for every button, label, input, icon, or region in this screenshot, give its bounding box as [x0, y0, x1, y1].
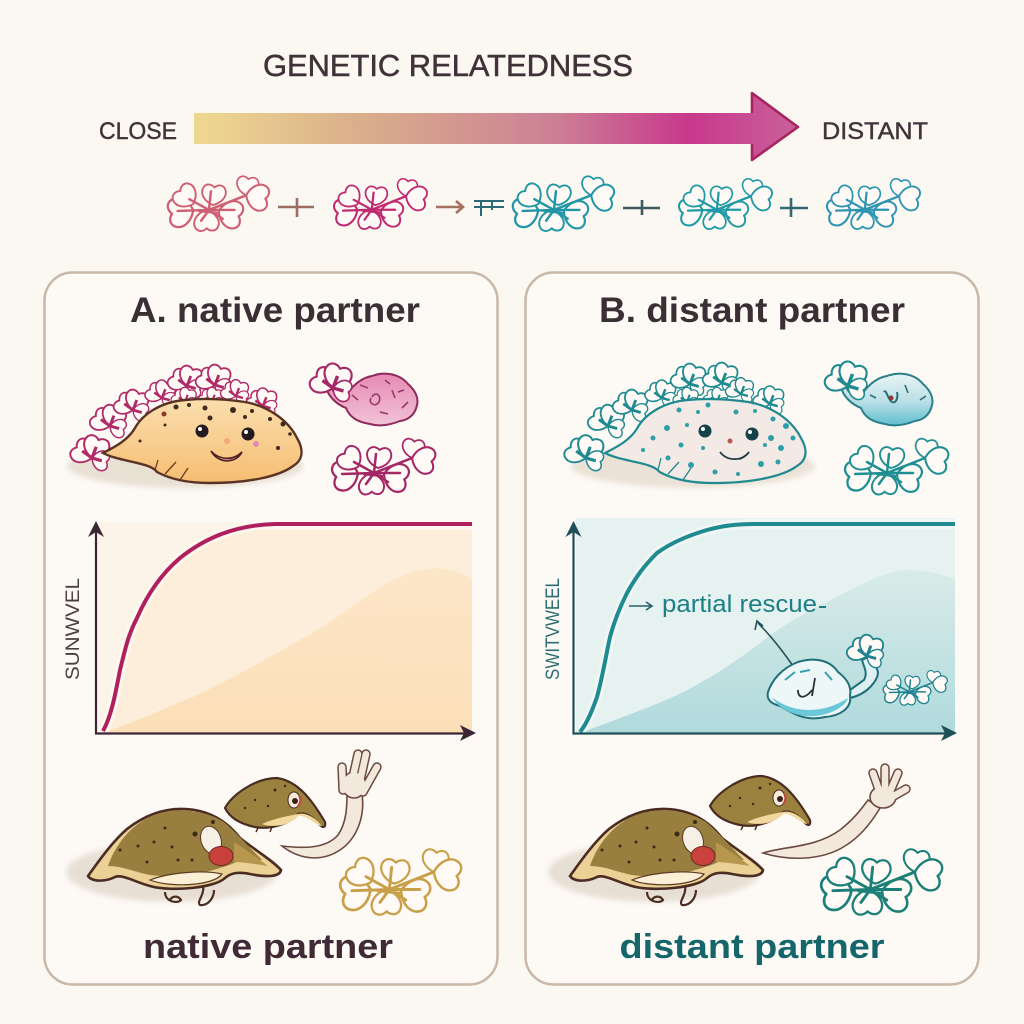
caption distant: distant partner: [620, 928, 884, 966]
connector 5: [780, 198, 808, 217]
chart background: [576, 518, 955, 733]
illustration: small pink potato: [307, 361, 418, 425]
icon: flower 2: [333, 178, 428, 229]
y axis label: SWITVWEEL: [543, 578, 564, 680]
illustration: small teal potato: [822, 359, 933, 425]
panel frame: [526, 272, 978, 984]
icon: flower 5: [826, 178, 921, 229]
caption native: native partner: [143, 928, 393, 966]
axes: [574, 528, 950, 734]
label: distant: DISTANT: [822, 118, 928, 145]
label: close: CLOSE: [99, 118, 177, 145]
curve: [103, 524, 472, 731]
connector 4: [623, 200, 660, 215]
arm: [282, 754, 377, 858]
chart: native survival curve: [63, 521, 476, 741]
heading A: A. native partner: [130, 291, 420, 330]
illustration: gold flower: [339, 848, 462, 915]
axes: [96, 528, 470, 734]
arrow: genetic relatedness gradient: [194, 93, 798, 160]
callout: partial rescue: partial rescue: [662, 591, 817, 618]
icon: flower 3: [512, 176, 615, 231]
lower area: [103, 568, 472, 733]
illustration: wilted potato with reaching arm, distant: [548, 768, 906, 905]
axis arrowheads: [566, 521, 957, 741]
y axis label: SUNWVEL: [63, 578, 84, 680]
arm: [763, 768, 906, 858]
connector 1: [278, 198, 314, 217]
illustration: rescued potato in chart: [768, 633, 948, 718]
curve: [580, 524, 955, 732]
chart background: [98, 522, 472, 733]
illustration: wilted potato with reaching arm: [66, 754, 377, 905]
panel: B distant partner: [526, 272, 978, 984]
illustration: teal flower: [844, 438, 950, 495]
illustration: pink flower: [331, 438, 437, 495]
illustration: pale potato with teal flowers: [562, 361, 815, 488]
flower sequence strip: [167, 176, 921, 231]
connector 3: [474, 201, 504, 216]
icon: flower 4: [678, 178, 773, 229]
connector 2: [436, 201, 463, 213]
curve halo: [103, 524, 472, 731]
title: GENETIC RELATEDNESS: [263, 48, 633, 83]
axis arrowheads: [88, 521, 476, 741]
panel: A native partner: [44, 272, 498, 984]
illustration: deep teal flower: [820, 848, 943, 915]
curve halo: [580, 524, 955, 732]
chart: distant survival curve: [543, 518, 957, 741]
area under upper curve: [103, 529, 472, 733]
panel frame: [44, 272, 498, 984]
heading B: B. distant partner: [599, 291, 905, 330]
lower area: [580, 570, 955, 733]
icon: flower 1: [167, 176, 270, 231]
callout: partial rescue: [629, 591, 826, 666]
illustration: healthy potato with flowers: [67, 363, 303, 488]
